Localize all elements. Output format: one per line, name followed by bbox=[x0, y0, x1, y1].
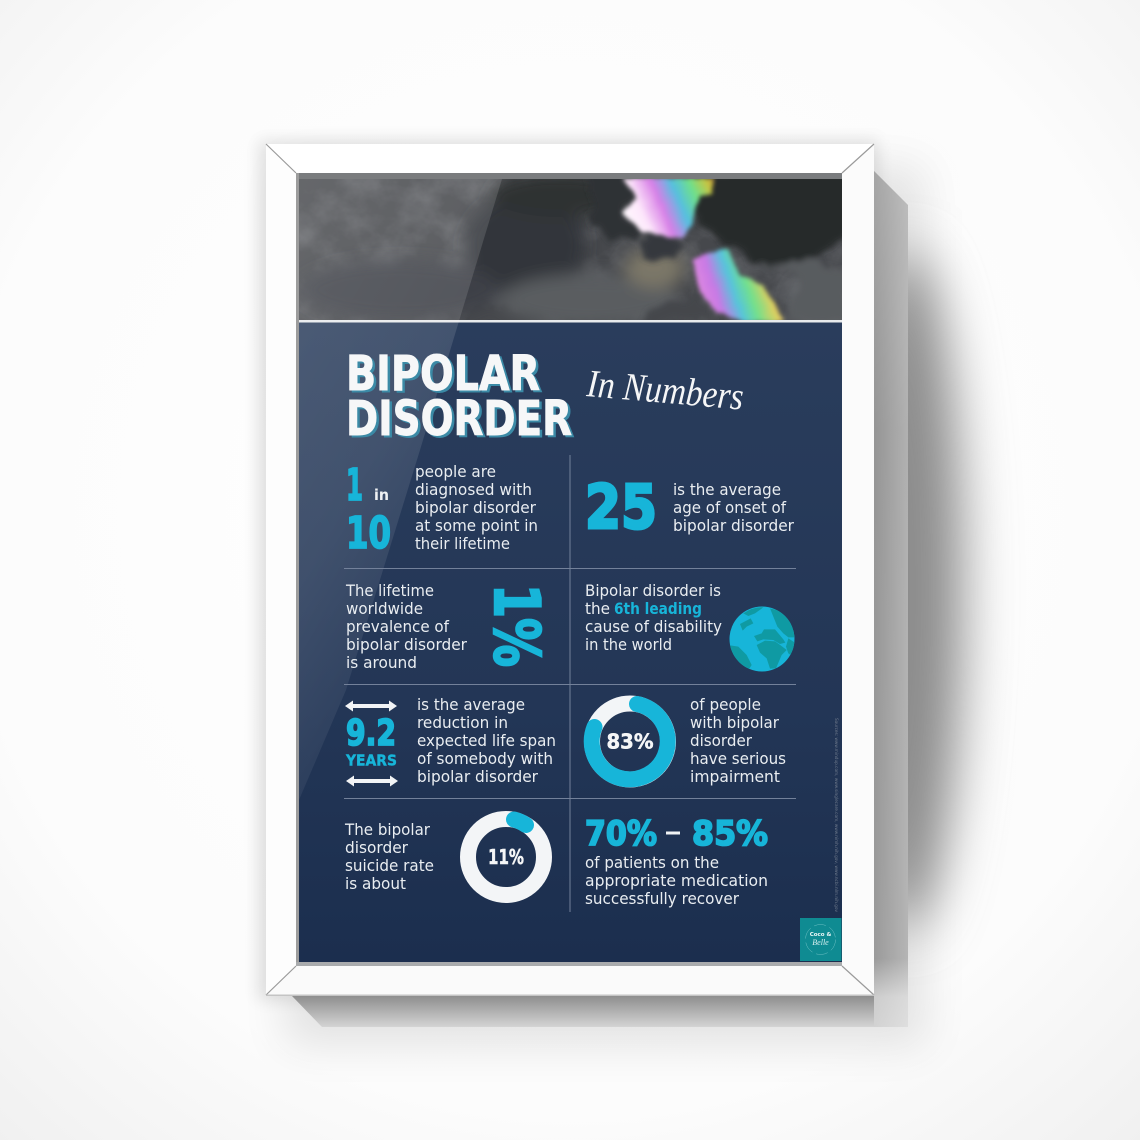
text: serious impairment: of people bbox=[690, 695, 761, 714]
logo: Coco & Belle bbox=[800, 918, 842, 961]
rainbow gap lower bbox=[692, 249, 783, 322]
title: DISORDER bbox=[348, 393, 574, 449]
donut chart: 83%: 83% bbox=[606, 730, 654, 754]
stat: 1 in 10: their lifetime bbox=[415, 534, 510, 553]
stat: 9.2 years: reduction in bbox=[417, 713, 508, 732]
stat: 6th leading cause: 6th leading bbox=[614, 599, 702, 618]
donut chart: 11% bbox=[468, 819, 544, 895]
stat: 1 in 10 bbox=[346, 460, 538, 559]
stat: 1 in 10: at some point in bbox=[415, 516, 538, 535]
glass reflection bbox=[299, 179, 502, 800]
text: suicide rate: The bipolar bbox=[344, 820, 430, 839]
stat: 1% lifetime prevalence: is around bbox=[346, 653, 417, 672]
stat: 25 average age: is the average bbox=[673, 480, 781, 499]
donut chart: 11%: 11% bbox=[488, 845, 524, 869]
grid dividers bbox=[344, 455, 796, 912]
stat: 1% lifetime prevalence: The lifetime bbox=[345, 581, 434, 600]
logo: Coco & Belle: Belle bbox=[812, 938, 829, 947]
text: serious impairment: impairment bbox=[690, 767, 780, 786]
stat: 70% - 85% recover: of patients on the bbox=[585, 853, 719, 872]
text: serious impairment: have serious bbox=[690, 749, 786, 768]
soft cloud masses bbox=[306, 179, 799, 320]
text: suicide rate: suicide rate bbox=[345, 856, 434, 875]
stat: 70% - 85% recover: 85% bbox=[692, 814, 768, 854]
stat: 9.2 years: expected life span bbox=[417, 731, 556, 750]
stat: 25 average age bbox=[585, 472, 794, 543]
stat: 6th leading cause bbox=[585, 581, 722, 654]
stat: 6th leading cause: the bbox=[585, 599, 610, 618]
stat: 1 in 10: bipolar disorder bbox=[415, 498, 536, 517]
stat: 1% lifetime prevalence: worldwide bbox=[346, 599, 423, 618]
subtitle: In Numbers: In Numbers bbox=[584, 362, 745, 419]
stat: 9.2 years: bipolar disorder bbox=[417, 767, 538, 786]
stat: 1% lifetime prevalence: 1% bbox=[480, 584, 553, 667]
rainbow gap upper bbox=[622, 178, 714, 238]
dark storm cloud mass bbox=[590, 170, 850, 322]
text: serious impairment bbox=[690, 695, 786, 786]
icon: double arrow top bbox=[345, 700, 397, 712]
text: serious impairment: with bipolar bbox=[690, 713, 779, 732]
stat: 1% lifetime prevalence: bipolar disorder bbox=[346, 635, 467, 654]
stat: 9.2 years: YEARS bbox=[345, 752, 397, 770]
stat: 1 in 10: 10 bbox=[346, 508, 391, 559]
stat: 70% - 85% recover bbox=[585, 814, 768, 908]
text: suicide rate bbox=[344, 820, 434, 893]
stat: 25 average age: age of onset of bbox=[673, 498, 786, 517]
text: serious impairment: disorder bbox=[690, 731, 752, 750]
stat: 1 in 10: in bbox=[374, 486, 389, 504]
stat: 9.2 years bbox=[345, 695, 556, 786]
text: suicide rate: disorder bbox=[345, 838, 408, 857]
white picture frame bbox=[266, 144, 874, 996]
logo: Coco & Belle: Coco & bbox=[810, 932, 831, 938]
donut chart: 83% bbox=[592, 704, 668, 780]
stat: 9.2 years: 9.2 bbox=[346, 713, 396, 754]
stat: 1 in 10: people are bbox=[415, 462, 496, 481]
stat: 1 in 10: 1 bbox=[346, 460, 363, 511]
stat: 6th leading cause: cause of disability bbox=[585, 617, 722, 636]
sources vertical text: Sources: www.mindup.com, www.singlecare.com, www.nimh.nih.gov, www.ncbi.nlm.nih.gov bbox=[833, 718, 839, 912]
title: DISORDER bbox=[346, 391, 572, 447]
stat: 6th leading cause: in the world bbox=[585, 635, 672, 654]
title: BIPOLAR bbox=[348, 348, 542, 404]
icon: double arrow bottom bbox=[346, 776, 398, 786]
stat: 70% - 85% recover: 70% bbox=[585, 814, 657, 854]
stat: 70% - 85% recover: appropriate medication bbox=[585, 871, 768, 890]
panel: navy content background bbox=[298, 321, 842, 963]
stat: 70% - 85% recover: successfully recover bbox=[585, 889, 739, 908]
frame cast shadow bbox=[258, 140, 963, 1045]
inner frame shadow bbox=[296, 173, 842, 966]
separator line under photo bbox=[298, 320, 842, 322]
text: suicide rate: is about bbox=[345, 874, 406, 893]
title: BIPOLAR bbox=[346, 346, 540, 402]
stat: 1% lifetime prevalence: prevalence of bbox=[346, 617, 449, 636]
stat: 1 in 10: diagnosed with bbox=[415, 480, 532, 499]
stat: 6th leading cause: Bipolar disorder is bbox=[585, 581, 721, 600]
stat: 9.2 years: of somebody with bbox=[417, 749, 553, 768]
stat: 9.2 years: is the average bbox=[417, 695, 525, 714]
stat: 1% lifetime prevalence bbox=[345, 581, 553, 672]
icon: globe bbox=[728, 606, 797, 672]
stat: 25 average age: bipolar disorder bbox=[673, 516, 794, 535]
stat: 25 average age: 25 bbox=[585, 472, 657, 543]
panel: cloudy sky photo bbox=[299, 179, 842, 320]
title bbox=[346, 346, 574, 449]
